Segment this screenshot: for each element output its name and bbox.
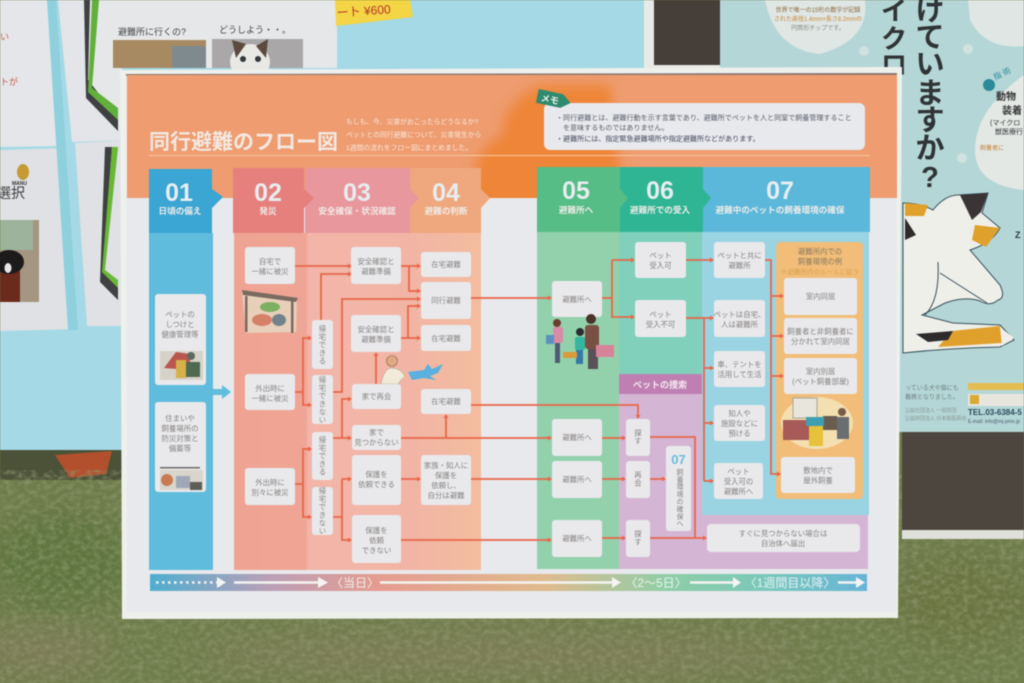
box: evacuate together: 同行避難 (431, 296, 461, 305)
memo box: ・同行避難とは、避難行動を示す言葉であり、避難所でペットを人と同室で飼養管理すること (556, 113, 852, 122)
illustration: sleeping calico cat (903, 193, 1021, 353)
intro text (346, 117, 481, 152)
box: safety check 1 (351, 247, 401, 284)
box: housing preparation: 防災対策と (162, 434, 198, 443)
background: right posters (644, 0, 1024, 539)
box: safety check 2: 安全確認と (358, 325, 394, 334)
illustration: pet room (781, 397, 853, 449)
header 01 (149, 169, 223, 233)
icon: pet care (160, 351, 203, 380)
poster heading: microchip: ロ (881, 50, 907, 80)
poster heading: vertical question: す (915, 105, 945, 137)
illustration: sleeping calico cat: Z (1015, 230, 1021, 240)
box: shelter accepting pets: ペット (727, 467, 750, 476)
panel: column body 05 (537, 232, 619, 569)
panel: orange header band (127, 75, 897, 210)
box: safety check 1: 安全確認と (358, 257, 394, 266)
box: to step 07: 07 (671, 452, 686, 467)
box: outdoors on site (781, 457, 855, 493)
box: to shelter 1: 避難所へ (562, 295, 592, 304)
poster text: left: い (0, 32, 9, 42)
poster text: left lower: トが (0, 76, 18, 87)
box: housing preparation (155, 402, 206, 492)
box: report to municipality (707, 524, 860, 552)
box: family request: 自分は避難 (428, 491, 465, 500)
box: can return 1: 帰宅できる (318, 325, 327, 365)
poster heading: vertical question (915, 0, 945, 194)
box: can return 2: 帰宅できる (318, 436, 327, 476)
box: separated same room: 分かれて室内同居 (791, 337, 850, 346)
box: can request protection: 保護を (365, 470, 388, 479)
box: search 2: 探す (633, 530, 642, 546)
box: stay home 1: 在宅避難 (431, 260, 461, 269)
box: car or tent: 活用して生活 (717, 370, 762, 379)
box: together at home (245, 247, 295, 284)
title: 同行避難のフロー図 (149, 131, 338, 154)
box: can request protection: 依頼できる (358, 480, 395, 489)
panel: column body 06 (619, 232, 702, 374)
box: pets not accepted: ペット (649, 310, 672, 319)
box: together at home: 自宅で (259, 257, 281, 266)
header 02 (233, 168, 314, 233)
box: separately when out (245, 468, 295, 505)
box: shelter accepting pets (714, 463, 763, 499)
illustration: under table (242, 290, 298, 333)
header 01: 01 (165, 179, 193, 207)
background: right posters: 装着 (1002, 104, 1022, 117)
header 04: 避難の判断 (425, 205, 468, 216)
box: safety check 1: 避難準備 (361, 267, 391, 276)
poster text: going to shelter: 避難所に行くの? (118, 26, 186, 37)
box: safety check 2: 避難準備 (361, 335, 391, 344)
box: separate room: (ペット飼養部屋) (792, 377, 849, 386)
box: shelter accepting pets: 受入可の (724, 477, 753, 486)
header 07: 避難中のペットの飼養環境の確保 (716, 204, 845, 215)
box: report to municipality: すぐに見つからない場合は (739, 529, 828, 538)
header 03 (305, 168, 419, 233)
poster footer: contact information: 公益社団法人 一般財団 (905, 407, 956, 414)
box: reunited at home (352, 384, 401, 409)
yellow sticky note: ート ¥600 (336, 2, 391, 20)
header 02: 発災 (259, 205, 277, 216)
header 02: 02 (254, 179, 282, 207)
box: same room (784, 278, 857, 315)
box: to shelter 2 (552, 419, 602, 456)
header 04: 04 (432, 179, 460, 207)
background: right posters: 指 術 (992, 65, 1012, 82)
box: shelter accepting pets: 避難所へ (724, 487, 754, 496)
header 01: 日頃の備え (159, 205, 201, 216)
background: right posters: 円筒形チップです。 (791, 24, 845, 32)
box: with pet at shelter: ペットと共に (717, 251, 762, 260)
box: reunite: 再会 (633, 471, 642, 488)
timeline bar: 〈1週間目以降〉 (745, 576, 835, 590)
poster footer: contact information: 義務となりました。 (905, 393, 959, 401)
box: friends or facilities (714, 405, 765, 441)
header 06 (619, 167, 711, 232)
box: separate room (784, 358, 857, 394)
shelter examples heading: 飼養環境の例 (798, 257, 842, 266)
memo box: ・避難所には、指定緊急避難場所や指定避難所などがあります。 (556, 134, 760, 143)
box: pets accepted: ペット (649, 251, 672, 260)
box: pet training: しつけと (165, 320, 195, 329)
header 03: 03 (343, 179, 371, 207)
header 07: 07 (766, 177, 794, 205)
header 04 (409, 168, 490, 233)
box: stay home 2 (421, 325, 471, 351)
intro text: もしも、今、災害がおこったらどうなるか? (346, 117, 478, 126)
background: left posters (0, 0, 337, 331)
memo tag (536, 89, 572, 110)
poster heading: vertical question: ? (921, 162, 939, 194)
box: not found at home: 見つからない (354, 438, 399, 447)
panel: pet search: ペットの捜索 (633, 379, 687, 390)
box: to shelter 4: 避難所へ (562, 534, 592, 543)
poster heading: vertical question: て (915, 22, 945, 54)
photo: dog (0, 220, 39, 302)
box: family request: 保護を (435, 471, 457, 480)
poster heading: microchip (881, 0, 907, 80)
shelter examples heading (781, 247, 859, 276)
box: to step 07: 飼養環境の確保へ (675, 468, 683, 528)
box: search 1 (626, 419, 650, 456)
poster footer: contact information: TEL.03-6384-5 (968, 408, 1022, 417)
background: right posters: (マイクロ (990, 119, 1020, 127)
box: friends or facilities: 預ける (728, 429, 751, 438)
box: friends or facilities: 知人や (728, 409, 751, 418)
yellow sticky note (335, 0, 413, 26)
box: cannot return 1: 帰宅できない (318, 376, 327, 424)
header 06: 避難所での受入 (630, 204, 690, 215)
flow connector lines (290, 258, 784, 542)
poster footer: contact information: E-mail: info@mj-pmo.jp (968, 419, 1020, 425)
background: right posters: 獣医療行 (995, 127, 1023, 136)
box: to step 07 (666, 446, 691, 531)
panel: orange shelter examples (776, 242, 863, 499)
box: not found at home (352, 425, 401, 450)
background: right posters: 飼養者に (980, 144, 1004, 152)
box: stay home 3: 在宅避難 (431, 397, 461, 406)
box: search 2 (626, 520, 650, 557)
box: family request: 依頼し、 (431, 481, 461, 490)
box: pet training: ペットの (165, 310, 195, 319)
box: pet training (155, 294, 206, 385)
memo box: を意味するものではありません。 (563, 123, 668, 132)
box: separated same room (784, 318, 857, 354)
illustration: family evacuating (546, 314, 614, 369)
poster heading: microchip: ク (881, 24, 907, 54)
box: cannot request protection (352, 515, 401, 563)
icon: home supplies (160, 467, 203, 490)
box: family request (421, 455, 471, 505)
poster footer: contact information (905, 383, 1024, 425)
box: cannot return 2 (312, 487, 333, 535)
box: pets not accepted: 受入不可 (646, 320, 675, 329)
header 05 (537, 167, 628, 232)
box: can return 2 (312, 432, 333, 480)
poster footer: contact information: っている犬や猫にも (905, 384, 959, 392)
poster heading: vertical question: い (915, 49, 945, 81)
shelter examples heading: ※避難所内のルールに従う (781, 267, 859, 276)
box: car or tent (714, 351, 765, 387)
box: can request protection (352, 455, 401, 505)
box: reunited at home: 家で再会 (362, 392, 392, 401)
box: pet at home: 人は避難所 (721, 320, 759, 329)
logo: MANU (12, 164, 29, 187)
box: to shelter 3 (552, 461, 602, 498)
background: right posters: 世界で唯一の15桁の数字が記録 (776, 6, 860, 14)
poster footer: contact information: 公益財団法人 日本獣医師会 (905, 415, 966, 422)
header 05: 05 (562, 177, 590, 205)
box: stay home 3 (421, 389, 471, 414)
box: not found at home: 家で (369, 428, 384, 437)
intro text: ペットとの同行避難について、災害発生から (346, 130, 481, 139)
memo tag: メモ (540, 93, 560, 106)
box: with pet at shelter: 避難所 (728, 261, 751, 270)
box: together when out: 一緒に被災 (252, 394, 289, 403)
box: outdoors on site: 敷地内で (803, 466, 833, 475)
box: stay home 2: 在宅避難 (431, 334, 461, 343)
box: pet training: 健康管理等 (162, 330, 199, 339)
box: to shelter 4 (552, 520, 602, 557)
photo: cat (212, 39, 303, 80)
illustration: person with cat (381, 356, 443, 384)
box: separate room: 室内別居 (806, 367, 835, 376)
box: housing preparation: 備蓄等 (169, 444, 192, 453)
box: safety check 2 (351, 315, 401, 352)
poster text: what to do: どうしよう・・。 (219, 25, 291, 35)
display board frame (120, 67, 902, 619)
box: reunite (626, 461, 650, 498)
box: housing preparation: 住まいや (165, 414, 195, 423)
box: cannot request protection: 依頼 (369, 536, 384, 545)
box: can return 1 (312, 320, 333, 369)
box: separated same room: 飼養者と非飼養者に (787, 327, 854, 336)
header 05: 避難所へ (559, 204, 594, 215)
shelter examples heading: 避難所内での (798, 247, 842, 256)
header 06: 06 (646, 177, 674, 205)
box: car or tent: 車、テントを (717, 360, 762, 369)
box: friends or facilities: 施設などに (721, 419, 758, 428)
box: pet at home (714, 300, 765, 337)
panel: column bodies 02 to 04 (234, 233, 481, 570)
poster heading: vertical question: か (915, 133, 945, 165)
timeline bar (150, 574, 867, 591)
box: evacuate together (421, 282, 471, 319)
box: separately when out: 別々に被災 (252, 488, 289, 497)
box: pet at home: ペットは自宅、 (714, 310, 765, 319)
box: pets accepted: 受入可 (649, 261, 672, 270)
background: right posters: された直径1.4mm×長さ8.2mmの (774, 15, 862, 23)
panel: column body 07 (702, 232, 869, 515)
box: family request: 家族・知人に (424, 461, 468, 470)
photo: room (113, 40, 206, 68)
box: separately when out: 外出時に (255, 478, 285, 487)
intro text: 1週間の流れをフロー図にまとめました。 (346, 143, 472, 152)
box: stay home 1 (421, 252, 471, 277)
header 07 (702, 167, 870, 232)
box: same room: 室内同居 (806, 292, 835, 301)
box: together when out (245, 374, 295, 410)
box: housing preparation: 飼養場所の (162, 424, 198, 433)
memo box (544, 103, 865, 150)
panel: column bodies 01 (149, 233, 213, 570)
arrow: column 01 to 02 (212, 385, 231, 399)
box: together when out: 外出時に (255, 384, 285, 393)
box: pets not accepted (635, 300, 686, 337)
box: to shelter 2: 避難所へ (562, 433, 592, 442)
box: outdoors on site: 屋外飼養 (803, 476, 833, 485)
box: pets accepted (635, 242, 686, 278)
timeline bar: 〈2〜5日〉 (625, 576, 687, 590)
box: cannot request protection: できない (362, 546, 391, 555)
box: to shelter 3: 避難所へ (562, 475, 592, 484)
poster heading: vertical question: ま (915, 78, 945, 110)
box: to shelter 1 (552, 281, 602, 317)
box: cannot request protection: 保護を (365, 526, 388, 535)
box: cannot return 2: 帰宅できない (318, 487, 327, 535)
box: with pet at shelter (714, 242, 765, 278)
box: together at home: 一緒に被災 (252, 267, 289, 276)
logo: MANU: MANU (12, 181, 27, 187)
panel: pet search (619, 374, 868, 569)
timeline bar: 〈当日〉 (331, 576, 379, 590)
header 03: 安全確保・状況確認 (318, 205, 396, 216)
background: right posters: 動物 (996, 90, 1016, 103)
arrowheads (308, 258, 784, 542)
box: cannot return 1 (312, 375, 333, 424)
box: report to municipality: 自治体へ届出 (761, 539, 805, 548)
box: search 1: 探す (633, 429, 642, 445)
